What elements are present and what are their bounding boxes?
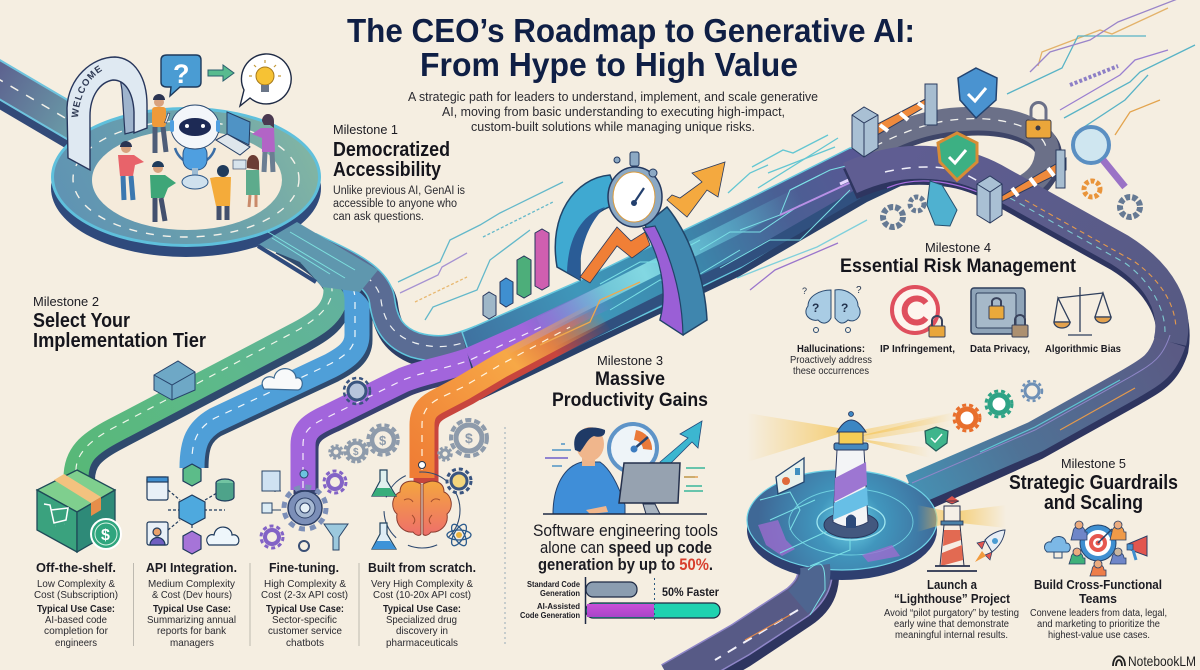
milestone 5 text: lighthouse project: meaningful internal results. [895, 630, 1008, 641]
milestone 3 heading: Massive [595, 369, 665, 390]
robot with microphone [170, 105, 220, 189]
purple tier road [303, 347, 503, 494]
lighthouse main [747, 412, 955, 538]
milestone 3 heading: Milestone 3 [597, 353, 663, 368]
icon: light bulb bubble [240, 54, 291, 106]
main road over the peak and around the right side [850, 162, 1176, 498]
tier: API integration: Typical Use Case: [153, 604, 231, 615]
milestone 1 text: Democratized [333, 139, 450, 161]
tier: off-the-shelf: Low Complexity & [37, 578, 115, 590]
milestone 4 heading [840, 240, 1077, 277]
roads: blue implementation tier [192, 245, 360, 468]
icon: question speech bubble [161, 55, 201, 96]
people around the robot [118, 94, 275, 222]
milestone 5 text: cross-functional teams: and marketing to prioritize the [1037, 619, 1160, 630]
milestone 3 heading [552, 353, 708, 411]
icon: developer with gauge and monitor [543, 421, 707, 514]
tier: built from scratch: Typical Use Case: [383, 604, 461, 615]
tier: built from scratch [368, 560, 476, 649]
risk labels: Proactively address [790, 354, 872, 366]
tier: off-the-shelf: completion for [44, 625, 108, 637]
icon: shopping box [37, 470, 121, 552]
risk labels: these occurrences [793, 365, 869, 377]
icon: API network [147, 464, 239, 554]
arch, growth arrows and stopwatch [555, 152, 725, 335]
risk icon: hallucinations brain [802, 285, 862, 332]
floating card by plaza [776, 458, 804, 494]
tier: fine-tuning: chatbots [286, 637, 324, 649]
lighthouse plaza [670, 470, 937, 670]
tier: fine-tuning: High Complexity & [264, 578, 346, 590]
milestone 5 heading: and Scaling [1044, 492, 1143, 514]
risk labels: Algorithmic Bias [1045, 343, 1121, 355]
road: from left into the welcome ring [0, 74, 80, 137]
welcome ring road [51, 107, 378, 292]
risk labels: Data Privacy, [970, 343, 1030, 355]
milestone 5 heading: Milestone 5 [1061, 456, 1126, 471]
milestone 5 text: cross-functional teams [1030, 577, 1167, 641]
loop road behind barriers [868, 119, 1049, 194]
bar chart: code generation speed: 50% Faster [662, 587, 719, 599]
milestone 1 text: Unlike previous AI, GenAI is [333, 185, 465, 197]
milestone 1 text: Milestone 1 [333, 122, 398, 137]
subtitle [408, 90, 818, 134]
risk icon: data safe [971, 288, 1028, 337]
subtitle: AI, moving from basic understanding to executing high-impact, [442, 105, 785, 119]
tier: built from scratch: Specialized drug [386, 614, 457, 626]
milestone 5 text: lighthouse project: “Lighthouse” Project [894, 591, 1011, 606]
barriers and shields [852, 68, 1140, 227]
tier: API integration: reports for bank [157, 625, 227, 637]
road: dark branch joining the main road [310, 245, 483, 355]
title: The CEO’s Roadmap to Generative AI: [347, 12, 915, 49]
welcome arch: WELCOME [71, 65, 102, 118]
risk icon: copyright lock [892, 287, 945, 337]
bar chart: code generation speed: AI-Assisted [537, 601, 580, 611]
icon: fine-tuning gear [261, 470, 348, 551]
milestone 3 heading: Productivity Gains [552, 390, 708, 411]
milestone 4 heading: Essential Risk Management [840, 256, 1077, 277]
milestone 5 text: cross-functional teams: Teams [1079, 591, 1117, 606]
risk labels: Hallucinations: [797, 343, 865, 355]
decorative circuit traces upper right [1007, 0, 1195, 135]
tier: fine-tuning: Cost (2-3x API cost) [261, 589, 348, 601]
tier: API integration: managers [170, 637, 214, 649]
risk icon: hallucinations brain: ? [856, 285, 862, 296]
milestone 2 text: Milestone 2 [33, 294, 99, 309]
decorative traces near milestone bars [398, 135, 867, 320]
tier: off-the-shelf: Typical Use Case: [37, 604, 115, 615]
milestone 1 text [333, 122, 465, 223]
tier: fine-tuning: Typical Use Case: [266, 604, 344, 615]
milestone 2 text: Implementation Tier [33, 330, 206, 352]
bar chart: code generation speed [520, 577, 720, 624]
bar chart on main road edge [483, 229, 549, 319]
milestone 5 text: lighthouse project [884, 577, 1019, 641]
bar chart: code generation speed: Standard Code [527, 579, 580, 589]
title [347, 12, 915, 83]
cost gears: $ [379, 433, 387, 448]
risk icon: hallucinations brain: ? [812, 301, 819, 315]
milestone 5 heading [1009, 456, 1178, 514]
milestone 3 statement: generation by up to 50%. [538, 555, 713, 574]
title: From Hype to High Value [420, 46, 798, 83]
tier: built from scratch: Cost (10-20x API cost) [373, 589, 471, 601]
milestone 5 text: lighthouse project: Launch a [927, 577, 978, 592]
tier: API integration: API Integration. [146, 560, 237, 575]
risk labels [790, 343, 1121, 377]
tier: built from scratch: discovery in [396, 625, 448, 637]
cost gears: $ [465, 430, 473, 446]
tier: API integration: Summarizing annual [147, 614, 236, 626]
risk icon: hallucinations brain: ? [841, 301, 848, 315]
bar chart: code generation speed: Code Generation [520, 610, 580, 620]
icon: brain with lab icons [372, 462, 471, 549]
milestone 5 text: cross-functional teams: Convene leaders from data, legal, [1030, 608, 1167, 619]
milestone 1 text: accessible to anyone who [333, 198, 457, 210]
cost gears: $ [353, 447, 359, 458]
subtitle: custom-built solutions while managing unique risks. [471, 120, 755, 134]
bar chart: code generation speed: Generation [540, 588, 580, 598]
welcome arch [66, 56, 148, 171]
tier: off-the-shelf [34, 560, 118, 649]
milestone 5 heading: Strategic Guardrails [1009, 472, 1178, 494]
icon: question speech bubble: ? [173, 59, 190, 89]
milestone 5 text: lighthouse project: early wine that demonstrate [894, 619, 1009, 630]
shield and gears on right road [925, 381, 1042, 451]
milestone 2 text: Select Your [33, 310, 130, 332]
tier: off-the-shelf: Cost (Subscription) [34, 589, 118, 601]
roads: green implementation tier [76, 236, 339, 480]
subtitle: A strategic path for leaders to understand, implement, and scale generative [408, 90, 818, 104]
arrow: question to idea [208, 65, 234, 81]
tier: built from scratch: Built from scratch. [368, 560, 476, 575]
milestone 5 text: cross-functional teams: Build Cross-Functional [1034, 577, 1162, 592]
tier: fine-tuning: Sector-specific [272, 614, 337, 626]
purple and orange bands on main road [303, 282, 640, 488]
milestone 4 heading: Milestone 4 [925, 240, 991, 255]
tier: API integration [146, 560, 237, 649]
milestone 1 text: can ask questions. [333, 211, 424, 223]
icon: small lighthouse and rocket [917, 496, 1006, 571]
tier: off-the-shelf: Off-the-shelf. [36, 560, 116, 575]
tier: fine-tuning: customer service [268, 625, 342, 637]
tier: fine-tuning: Fine-tuning. [269, 560, 339, 575]
road icons: box, cloud, gear [154, 361, 370, 404]
cost gears [330, 420, 487, 462]
milestone 5 text: lighthouse project: Avoid “pilot purgatory” by testing [884, 608, 1019, 619]
tier: API integration: Medium Complexity [148, 578, 236, 590]
icon: shopping box: $ [101, 527, 110, 544]
trace overlays on main road [600, 165, 850, 310]
risk icon: hallucinations brain: ? [802, 286, 807, 296]
risk icon: scales of bias [1054, 287, 1111, 335]
tier: off-the-shelf: engineers [55, 637, 97, 649]
milestone 5 text: cross-functional teams: highest-value use cases. [1048, 630, 1150, 641]
milestone 3 statement [533, 521, 718, 574]
icon: cross-functional team target [1044, 521, 1147, 576]
tier: off-the-shelf: AI-based code [45, 614, 107, 626]
tier: built from scratch: pharmaceuticals [386, 637, 458, 649]
milestone 3 statement: Software engineering tools [533, 521, 718, 540]
tier: fine-tuning [261, 560, 348, 649]
tier: API integration: & Cost (Dev hours) [152, 589, 232, 601]
risk labels: IP Infringement, [880, 343, 955, 355]
milestone 2 text [33, 294, 206, 352]
milestone 1 text: Accessibility [333, 159, 442, 181]
tier: built from scratch: Very High Complexity & [371, 578, 473, 590]
milestone 3 statement: alone can speed up code [540, 538, 712, 557]
main diagonal road [462, 148, 905, 400]
